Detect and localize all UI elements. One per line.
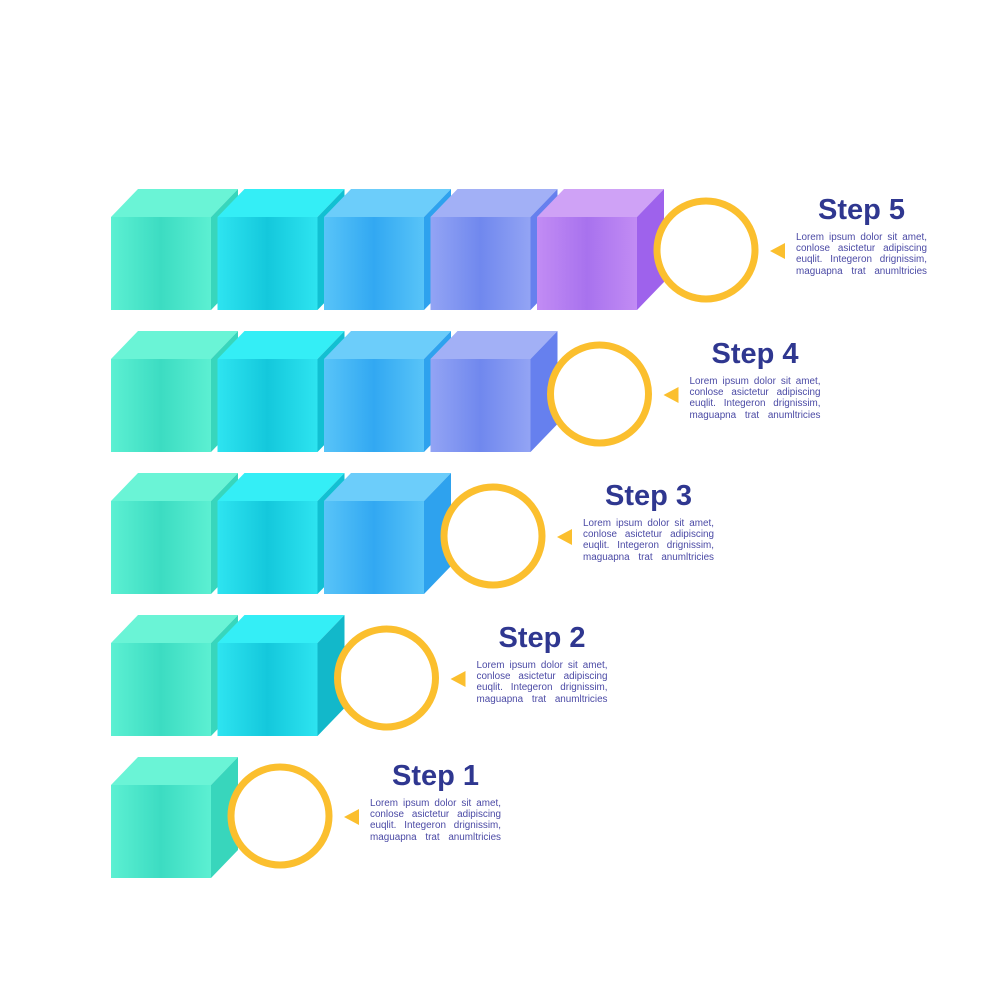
text: step 4: Step 4 [711, 338, 799, 370]
circle step 1 [231, 767, 329, 865]
circle step 3 [444, 487, 542, 585]
row 2 cubes [111, 615, 344, 736]
row 1 cube [111, 757, 238, 878]
row 3 cubes [111, 473, 451, 594]
arrow step 2 [450, 671, 466, 687]
text: step 1 [370, 760, 501, 843]
circle step 4 [550, 345, 648, 443]
text: step 3: Lorem ipsum dolor sit amet, conlose asictetur adipiscing euqlit. Integeron drignissim, maguapna trat anumltricies [583, 518, 714, 563]
text: step 1: Lorem ipsum dolor sit amet, conlose asictetur adipiscing euqlit. Integeron drignissim, maguapna trat anumltricies [370, 798, 501, 843]
text: step 4: Lorem ipsum dolor sit amet, conlose asictetur adipiscing euqlit. Integeron drignissim, maguapna trat anumltricies [690, 376, 820, 421]
text: step 5 [796, 194, 927, 277]
text: step 3 [583, 480, 714, 563]
text: step 1: Step 1 [392, 760, 479, 792]
text: step 5: Lorem ipsum dolor sit amet, conlose asictetur adipiscing euqlit. Integeron drignissim, maguapna trat anumltricies [796, 232, 927, 277]
arrow step 5 [770, 243, 785, 259]
circle step 2 [338, 629, 436, 727]
circle step 5 [657, 201, 755, 299]
text: step 2 [476, 622, 608, 705]
arrow step 1 [344, 809, 359, 825]
text: step 3: Step 3 [605, 480, 692, 512]
arrow step 4 [664, 387, 678, 403]
text: step 2: Lorem ipsum dolor sit amet, conlose asictetur adipiscing euqlit. Integeron drignissim, maguapna trat anumltricies [476, 660, 608, 705]
arrow step 3 [557, 529, 572, 545]
text: step 2: Step 2 [498, 622, 586, 654]
text: step 5: Step 5 [818, 194, 905, 226]
row 5 cubes [111, 189, 664, 310]
row 4 cubes [111, 331, 558, 452]
text: step 4 [690, 338, 820, 421]
